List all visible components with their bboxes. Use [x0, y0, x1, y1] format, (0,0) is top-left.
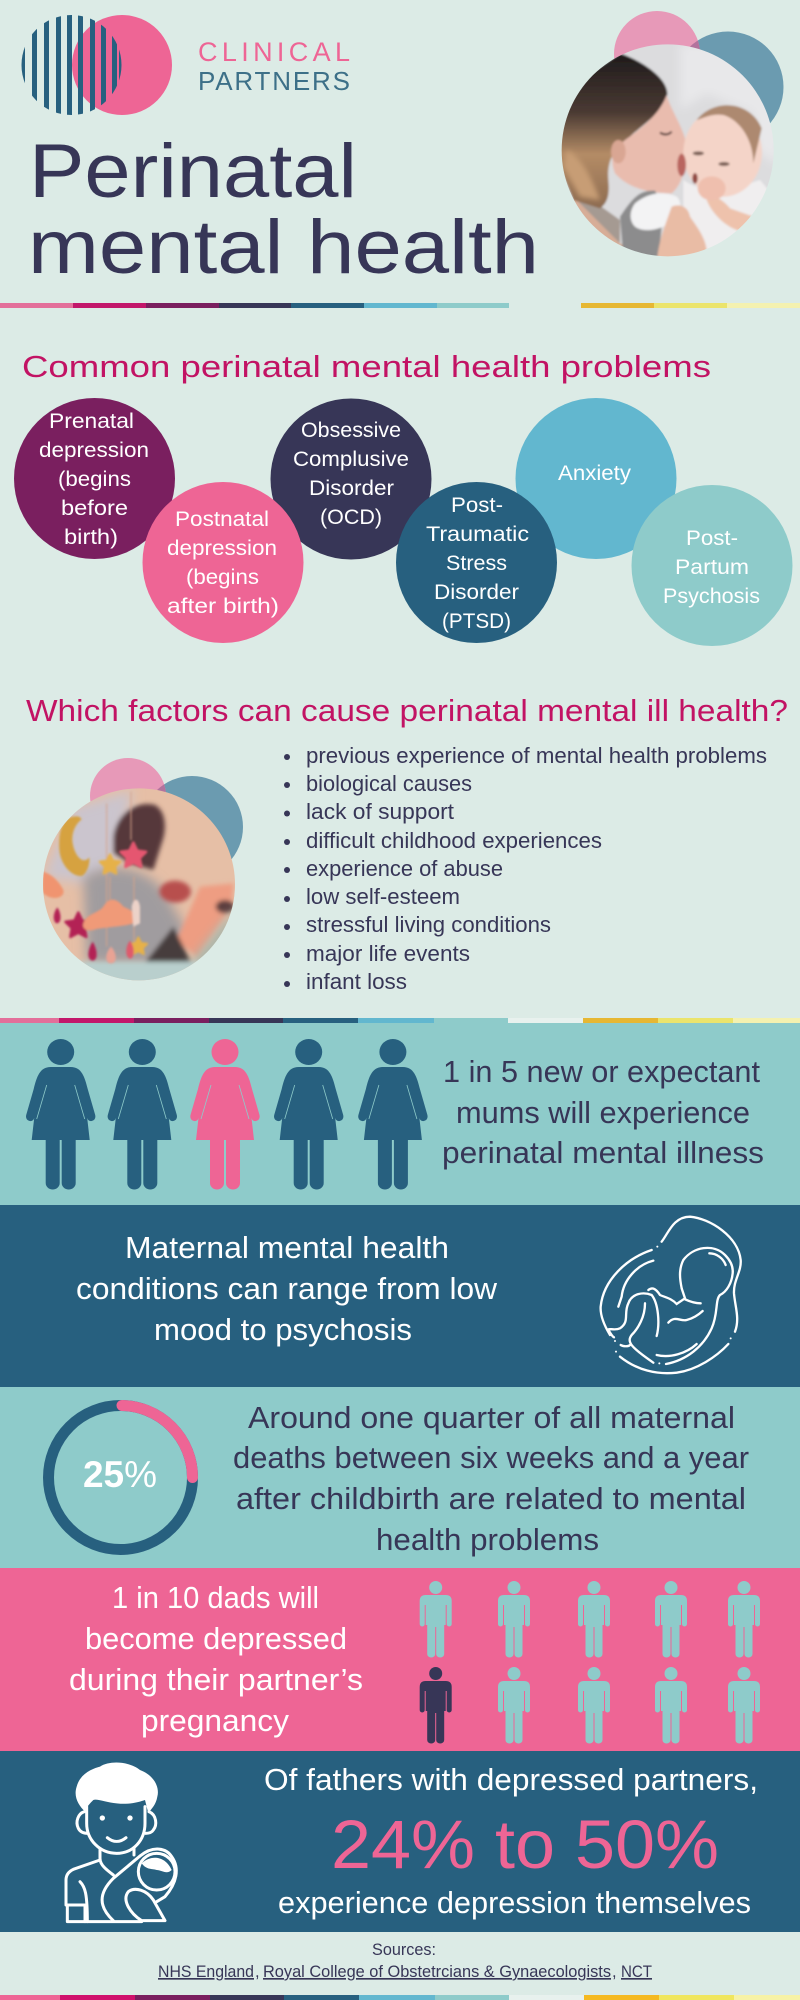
stat text with highlighted range: 24% to 50%: [331, 1806, 719, 1883]
stat text: become depressed: [85, 1621, 347, 1656]
bubble: prenatal depression: before: [61, 496, 128, 520]
sources: NHS England: [158, 1963, 254, 1981]
bulleted list of causes: stressful living conditions: [306, 912, 551, 937]
panel: bubbles of common problems: [14, 398, 792, 646]
bubble: anxiety: [516, 398, 676, 559]
panel: 1 in 10 dads: [0, 1568, 800, 1751]
bubble: PTSD: Post-: [451, 493, 503, 517]
stat text: [76, 1230, 498, 1347]
title: [28, 129, 539, 290]
stat text: [233, 1400, 749, 1557]
stat text: [442, 1054, 764, 1170]
stat text: mums will experience: [456, 1095, 750, 1130]
bubble: postnatal depression: after birth): [167, 594, 279, 618]
icon row: five women, one highlighted: [26, 1039, 428, 1190]
bulleted list of causes: infant loss: [306, 969, 407, 994]
bubble: OCD: Obsessive: [301, 418, 401, 442]
bulleted list of causes: lack of support: [306, 799, 454, 824]
title: mental health: [28, 205, 539, 290]
stat text with highlighted range: experience depression themselves: [278, 1885, 751, 1920]
bubble: post-partum psychosis: Partum: [675, 555, 749, 579]
bubble: prenatal depression: depression: [39, 438, 149, 462]
bulleted list of causes: experience of abuse: [306, 856, 503, 881]
bubble: prenatal depression: birth): [64, 525, 118, 549]
logo: Clinical Partners: [21, 10, 350, 120]
bubble: prenatal depression: (begins: [58, 467, 131, 491]
bulleted list of causes: previous experience of mental health problems: [306, 743, 767, 768]
bubble: PTSD: Disorder: [434, 580, 519, 604]
logo: Clinical Partners: PARTNERS: [198, 66, 350, 96]
panel: 1 in 5 mums: [0, 1023, 800, 1205]
stat text: deaths between six weeks and a year: [233, 1440, 749, 1475]
divider stripe bottom: [0, 1995, 800, 2000]
sources: Sources:: [372, 1941, 436, 1959]
bubble: postnatal depression: (begins: [186, 565, 259, 589]
photo: mother kissing baby with decorative circles: [553, 11, 784, 267]
bubble: prenatal depression: Prenatal: [49, 409, 134, 433]
title: Perinatal: [29, 129, 357, 214]
bubble: OCD: [270, 398, 432, 560]
stat text: 1 in 10 dads will: [112, 1580, 319, 1615]
bubble: postnatal depression: Postnatal: [175, 507, 269, 531]
bubble: PTSD: (PTSD): [442, 609, 511, 633]
bubble: PTSD: Traumatic: [426, 522, 529, 546]
stat text: [69, 1580, 363, 1738]
stat text: Maternal mental health: [125, 1230, 449, 1265]
stat text with highlighted range: Of fathers with depressed partners,: [264, 1762, 758, 1797]
stat text: mood to psychosis: [154, 1312, 412, 1347]
bulleted list of causes: low self-esteem: [306, 884, 460, 909]
photo: baby mobile with decorative circles: [40, 758, 243, 985]
icon grid: ten men, one highlighted: [420, 1581, 760, 1744]
stat text: health problems: [376, 1522, 599, 1557]
bubble: prenatal depression: [14, 398, 175, 559]
bubble: post-partum psychosis: Psychosis: [663, 584, 760, 608]
bubble: postnatal depression: depression: [167, 536, 277, 560]
sources: [158, 1941, 652, 1981]
bulleted list of causes: difficult childhood experiences: [306, 828, 602, 853]
chart: 25 percent ring: 25%: [83, 1454, 157, 1495]
bubble: postnatal depression: [142, 482, 304, 643]
chart: 25 percent ring: [48, 1406, 192, 1550]
icon: baby in womb: [601, 1217, 741, 1373]
bubble: PTSD: [396, 482, 557, 643]
bulleted list of causes: [284, 743, 767, 994]
bubble: OCD: (OCD): [320, 505, 382, 529]
logo: Clinical Partners: CLINICAL: [198, 37, 350, 67]
bulleted list of causes: biological causes: [306, 771, 472, 796]
bubble: OCD: Complusive: [293, 447, 409, 471]
stat text: 1 in 5 new or expectant: [443, 1054, 760, 1089]
heading: causes: Which factors can cause perinatal mental ill health?: [26, 693, 788, 728]
sources: Royal College of Obstetrcians & Gynaecologists: [263, 1963, 611, 1981]
bubble: post-partum psychosis: Post-: [686, 526, 738, 550]
panel: maternal deaths: [0, 1387, 800, 1568]
bubble: post-partum psychosis: [632, 485, 792, 646]
divider stripe top: [0, 303, 800, 308]
stat text with highlighted range: [264, 1762, 758, 1920]
bulleted list of causes: major life events: [306, 941, 470, 966]
bubble: anxiety: Anxiety: [558, 461, 631, 485]
panel: range of conditions: [0, 1205, 800, 1387]
stat text: perinatal mental illness: [442, 1135, 764, 1170]
stat text: conditions can range from low: [76, 1271, 498, 1306]
sources: ,: [255, 1963, 260, 1981]
sources: NCT: [621, 1963, 652, 1981]
divider stripe middle: [0, 1018, 800, 1023]
heading: common problems: Common perinatal mental health problems: [22, 349, 711, 384]
stat text: during their partner’s: [69, 1662, 363, 1697]
icon: father holding baby: [66, 1763, 176, 1922]
stat text: Around one quarter of all maternal: [248, 1400, 735, 1435]
stat text: pregnancy: [141, 1703, 289, 1738]
bubble: PTSD: Stress: [446, 551, 507, 575]
panel: fathers with depressed partners: [0, 1751, 800, 1932]
bubble: OCD: Disorder: [309, 476, 394, 500]
sources: ,: [612, 1963, 617, 1981]
stat text: after childbirth are related to mental: [236, 1481, 746, 1516]
